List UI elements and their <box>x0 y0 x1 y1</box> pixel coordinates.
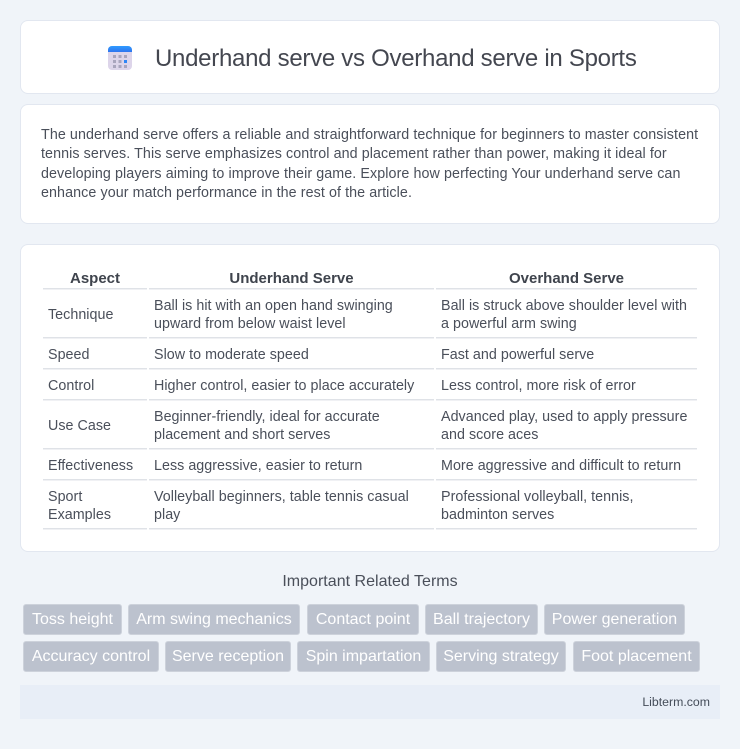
footer <box>20 685 720 719</box>
row: control: Less control, more risk of error <box>441 378 636 394</box>
row: control: Higher control, easier to place accurately <box>154 378 414 394</box>
row: speed <box>48 347 594 363</box>
row: effectiveness: More aggressive and difficult to return <box>441 458 681 474</box>
row: technique: a powerful arm swing <box>441 316 577 332</box>
row: technique: upward from below waist level <box>154 316 346 332</box>
row: use case: Use Case <box>48 418 111 434</box>
tag list: Foot placement <box>581 648 692 665</box>
tag list: Ball trajectory <box>433 611 530 628</box>
panel: comparison table <box>20 244 720 552</box>
intro text <box>41 127 698 201</box>
tag list: Accuracy control <box>32 648 150 665</box>
row: use case <box>48 409 687 443</box>
tag list: Power generation <box>552 611 677 628</box>
row: control: Control <box>48 378 94 394</box>
icon: calendar <box>108 46 132 70</box>
intro text: enhance your match performance in the rest of the article. <box>41 185 412 201</box>
row: technique: Ball is struck above shoulder level with <box>441 298 687 314</box>
column headings: Overhand Serve <box>509 270 624 287</box>
row: effectiveness <box>48 458 681 474</box>
tag list: Serving strategy <box>443 648 559 665</box>
row: speed: Speed <box>48 347 90 363</box>
column headings: Aspect <box>70 270 120 287</box>
title: Underhand serve vs Overhand serve in Sports <box>155 45 637 72</box>
row: use case: placement and short serves <box>154 427 330 443</box>
row: speed: Fast and powerful serve <box>441 347 594 363</box>
row: effectiveness: Effectiveness <box>48 458 133 474</box>
row: use case: Beginner-friendly, ideal for accurate <box>154 409 380 425</box>
tag list: Spin impartation <box>306 648 421 665</box>
intro text: developing players aiming to improve their game. Explore how perfecting Your underhand serve can <box>41 166 680 182</box>
row: technique <box>48 298 687 332</box>
column headings: Underhand Serve <box>229 270 354 287</box>
row: sport examples: Volleyball beginners, table tennis casual <box>154 489 409 505</box>
row: sport examples: Examples <box>48 507 111 523</box>
panel: introduction <box>20 104 720 224</box>
row: sport examples: Sport <box>48 489 82 505</box>
tag list: Contact point <box>316 611 410 628</box>
row: effectiveness: Less aggressive, easier to return <box>154 458 362 474</box>
row: sport examples: Professional volleyball, tennis, <box>441 489 633 505</box>
row: technique: Ball is hit with an open hand swinging <box>154 298 393 314</box>
tag list: Toss height <box>32 611 113 628</box>
row: control <box>48 378 636 394</box>
table content <box>43 270 697 530</box>
column headings <box>70 270 624 287</box>
row: sport examples: badminton serves <box>441 507 554 523</box>
tag list: Serve reception <box>172 648 284 665</box>
footer credit: Libterm.com <box>642 695 710 709</box>
intro text: The underhand serve offers a reliable and straightforward technique for beginners to master consistent <box>41 127 698 143</box>
heading: related terms: Important Related Terms <box>282 573 458 590</box>
row: sport examples <box>48 489 633 523</box>
tag list <box>23 604 700 672</box>
row: use case: and score aces <box>441 427 538 443</box>
intro text: tennis serves. This serve emphasizes control and placement rather than power, making it ideal for <box>41 146 667 162</box>
row: sport examples: play <box>154 507 180 523</box>
row: technique: Technique <box>48 307 113 323</box>
panel: header <box>20 20 720 94</box>
row: speed: Slow to moderate speed <box>154 347 309 363</box>
row: use case: Advanced play, used to apply pressure <box>441 409 687 425</box>
tag list: Arm swing mechanics <box>136 611 292 628</box>
